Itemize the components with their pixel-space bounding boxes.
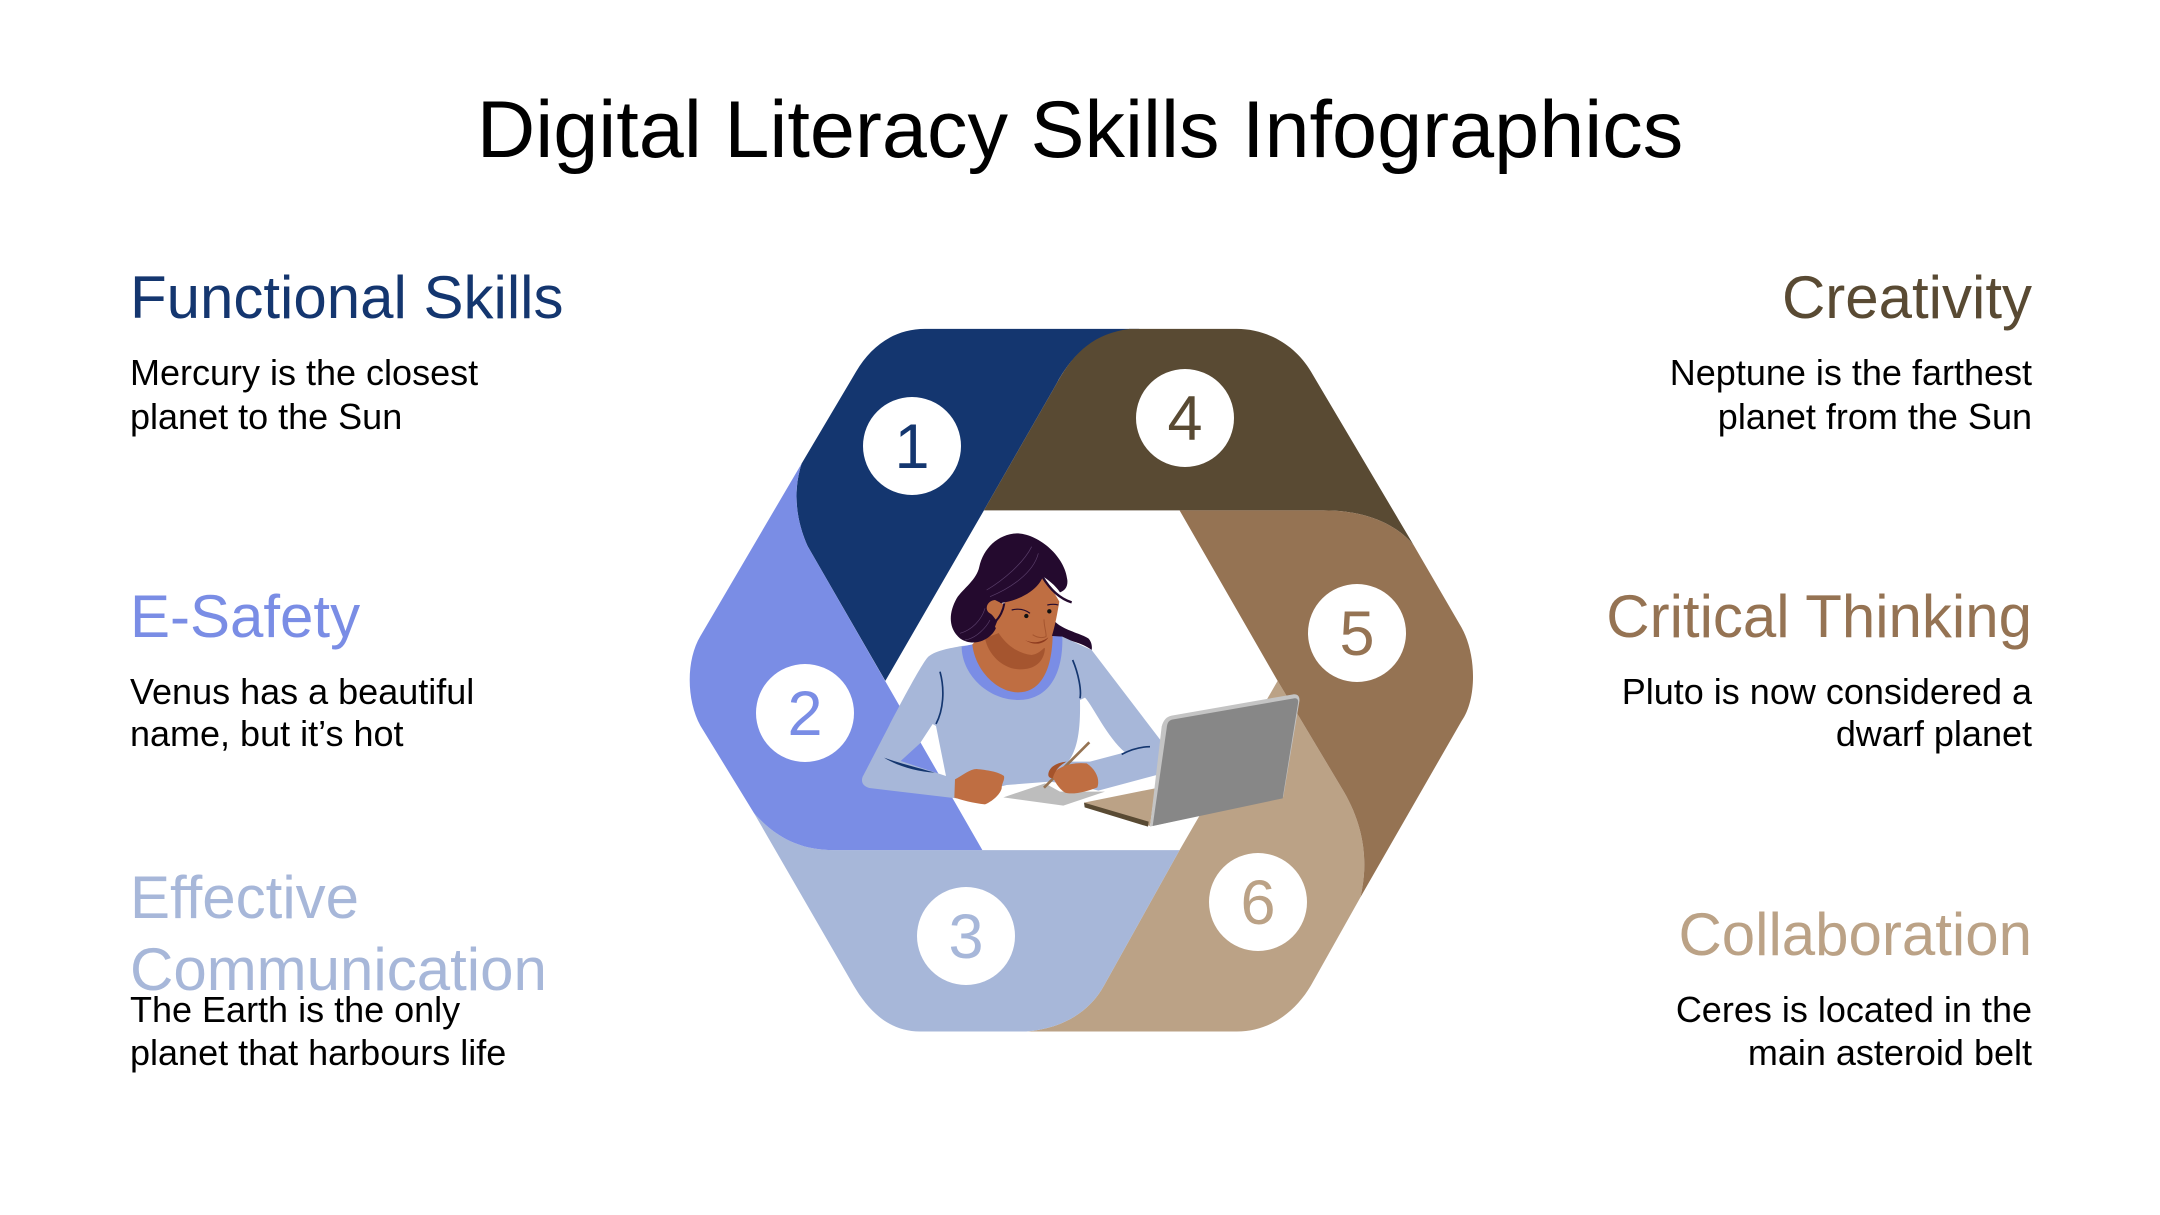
text: critical thinking description: Pluto is now considered a bbox=[1622, 671, 2032, 712]
number badge 2 bbox=[756, 664, 854, 762]
face bbox=[995, 577, 1059, 655]
hands, paper and pencil bbox=[954, 742, 1105, 806]
paper bbox=[1003, 783, 1105, 806]
text: creativity description: planet from the Sun bbox=[1718, 396, 2032, 437]
text: functional skills description: planet to the Sun bbox=[130, 396, 402, 437]
neck shadow bbox=[985, 630, 1045, 669]
text: creativity description: Neptune is the farthest bbox=[1670, 352, 2032, 393]
text: e-safety description: name, but it’s hot bbox=[130, 713, 404, 754]
heading: creativity: Creativity bbox=[1782, 264, 2032, 331]
collar bbox=[962, 636, 1062, 700]
cuff fold bbox=[884, 758, 935, 773]
heading: e-safety: E-Safety bbox=[130, 583, 360, 650]
text: effective communication description: planet that harbours life bbox=[130, 1032, 506, 1073]
segment 1: dark blue bbox=[797, 329, 1140, 681]
number badge 5: 5 bbox=[1339, 599, 1375, 669]
panel: functional skills bbox=[130, 264, 564, 437]
pencil bbox=[1044, 742, 1089, 788]
segment 5: mid brown bbox=[1180, 510, 1473, 897]
number badge 4: 4 bbox=[1167, 384, 1203, 454]
laptop screen rim bbox=[1150, 694, 1299, 827]
laptop screen bbox=[1153, 698, 1298, 826]
eyes and brows bbox=[1012, 604, 1058, 618]
neckline, face and hair bbox=[951, 533, 1072, 700]
hair ponytail bbox=[1050, 622, 1092, 650]
laptop base edge bbox=[1084, 803, 1149, 827]
segment 2: periwinkle bbox=[690, 464, 982, 850]
hair strands bbox=[960, 547, 1038, 640]
number badge 5 bbox=[1308, 584, 1406, 682]
thumb bbox=[1048, 762, 1067, 778]
text: e-safety description: Venus has a beautiful bbox=[130, 671, 474, 712]
number badge 6: 6 bbox=[1240, 868, 1276, 938]
panel: effective communication bbox=[130, 864, 547, 1073]
hair bbox=[951, 533, 1067, 642]
hexagon cycle diagram bbox=[690, 329, 1473, 1032]
text: functional skills description: Mercury is the closest bbox=[130, 352, 478, 393]
number badge 1 bbox=[863, 397, 961, 495]
laptop base bbox=[1084, 788, 1155, 826]
smile bbox=[1025, 637, 1048, 644]
sleeve folds bbox=[936, 660, 1150, 754]
text: effective communication description: The Earth is the only bbox=[130, 989, 460, 1030]
title: Digital Literacy Skills Infographics bbox=[477, 85, 1683, 175]
panel: critical thinking bbox=[1606, 583, 2033, 754]
heading: effective communication: Effective bbox=[130, 864, 359, 931]
heading: functional skills: Functional Skills bbox=[130, 264, 564, 331]
illustration: woman at laptop bbox=[862, 533, 1299, 827]
ear hair line bbox=[995, 603, 1004, 622]
text: collaboration description: Ceres is located in the bbox=[1676, 989, 2032, 1030]
nose bbox=[1033, 619, 1046, 637]
sweater bbox=[862, 637, 1162, 798]
panel: collaboration bbox=[1676, 901, 2032, 1073]
segment 6: light tan bbox=[1026, 681, 1364, 1032]
segment 4: brown bbox=[984, 329, 1414, 545]
segment 3: pale blue bbox=[754, 813, 1180, 1032]
heading: collaboration: Collaboration bbox=[1678, 901, 2032, 968]
heading: effective communication: Communication bbox=[130, 936, 547, 1003]
heading: critical thinking: Critical Thinking bbox=[1606, 583, 2032, 650]
left hand bbox=[954, 769, 1004, 804]
panel: e-safety bbox=[130, 583, 474, 754]
neck and chest bbox=[972, 627, 1053, 692]
number badge 3 bbox=[917, 887, 1015, 985]
text: critical thinking description: dwarf planet bbox=[1836, 713, 2032, 754]
text: collaboration description: main asteroid belt bbox=[1748, 1032, 2032, 1073]
number badge 3: 3 bbox=[948, 902, 984, 972]
number badge 6 bbox=[1209, 853, 1307, 951]
number badge 4 bbox=[1136, 369, 1234, 467]
hair fringe bbox=[1000, 576, 1072, 602]
ear bbox=[987, 600, 1005, 621]
number badge 2: 2 bbox=[787, 679, 823, 749]
laptop bbox=[1084, 694, 1299, 827]
right hand bbox=[1052, 763, 1098, 793]
number badge 1: 1 bbox=[894, 412, 930, 482]
panel: creativity bbox=[1670, 264, 2032, 437]
